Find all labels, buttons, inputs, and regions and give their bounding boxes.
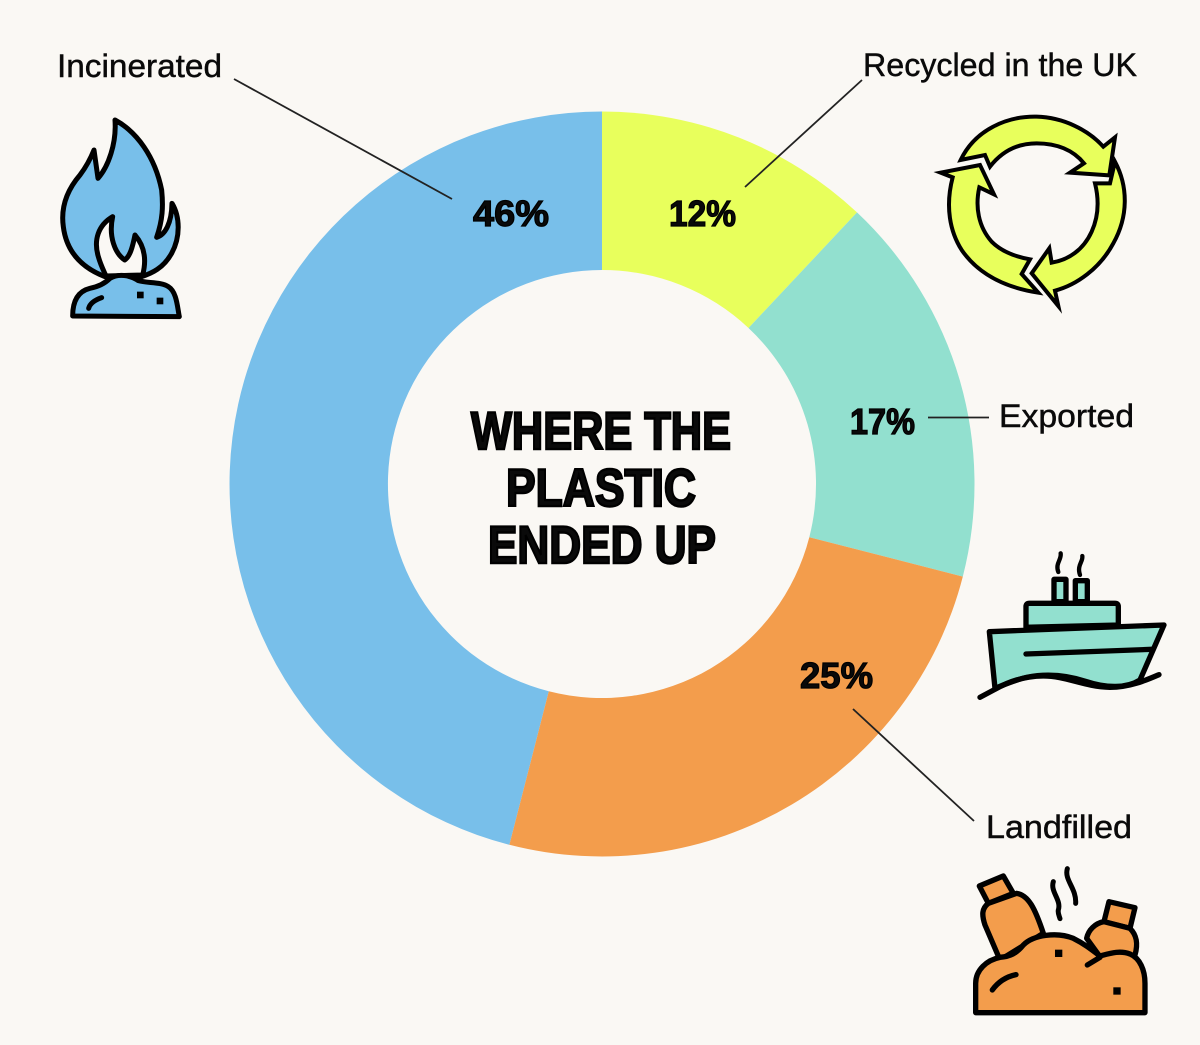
- segment: incinerated 46%: [230, 112, 602, 845]
- leader line: landfilled: [853, 709, 974, 821]
- icon: flame on pile: [63, 120, 179, 317]
- icon: ship: [980, 553, 1164, 697]
- value: 46%: 46%: [473, 193, 549, 234]
- label: recycled in the UK: Recycled in the UK: [863, 47, 1137, 83]
- icon: landfill with bottles: [976, 869, 1145, 1013]
- label: exported: Exported: [999, 398, 1134, 434]
- segment: recycled 12%: [602, 111, 857, 328]
- value: 12%: 12%: [669, 193, 736, 234]
- leader line: incinerated: [234, 79, 452, 199]
- title: WHERE THE: [471, 402, 731, 461]
- segment: exported 17%: [748, 212, 975, 577]
- value: 25%: 25%: [800, 655, 873, 696]
- leader line: exported: [928, 416, 989, 418]
- icon: recycling arrows: [941, 117, 1125, 306]
- segment: landfilled 25%: [509, 537, 963, 856]
- label: incinerated: Incinerated: [57, 48, 222, 84]
- leader line: recycled: [745, 80, 862, 187]
- donut chart: [230, 111, 975, 856]
- title: ENDED UP: [488, 516, 716, 575]
- title: [471, 402, 731, 575]
- label: landfilled: Landfilled: [986, 809, 1132, 845]
- value: 17%: 17%: [850, 401, 915, 442]
- title: PLASTIC: [506, 459, 696, 518]
